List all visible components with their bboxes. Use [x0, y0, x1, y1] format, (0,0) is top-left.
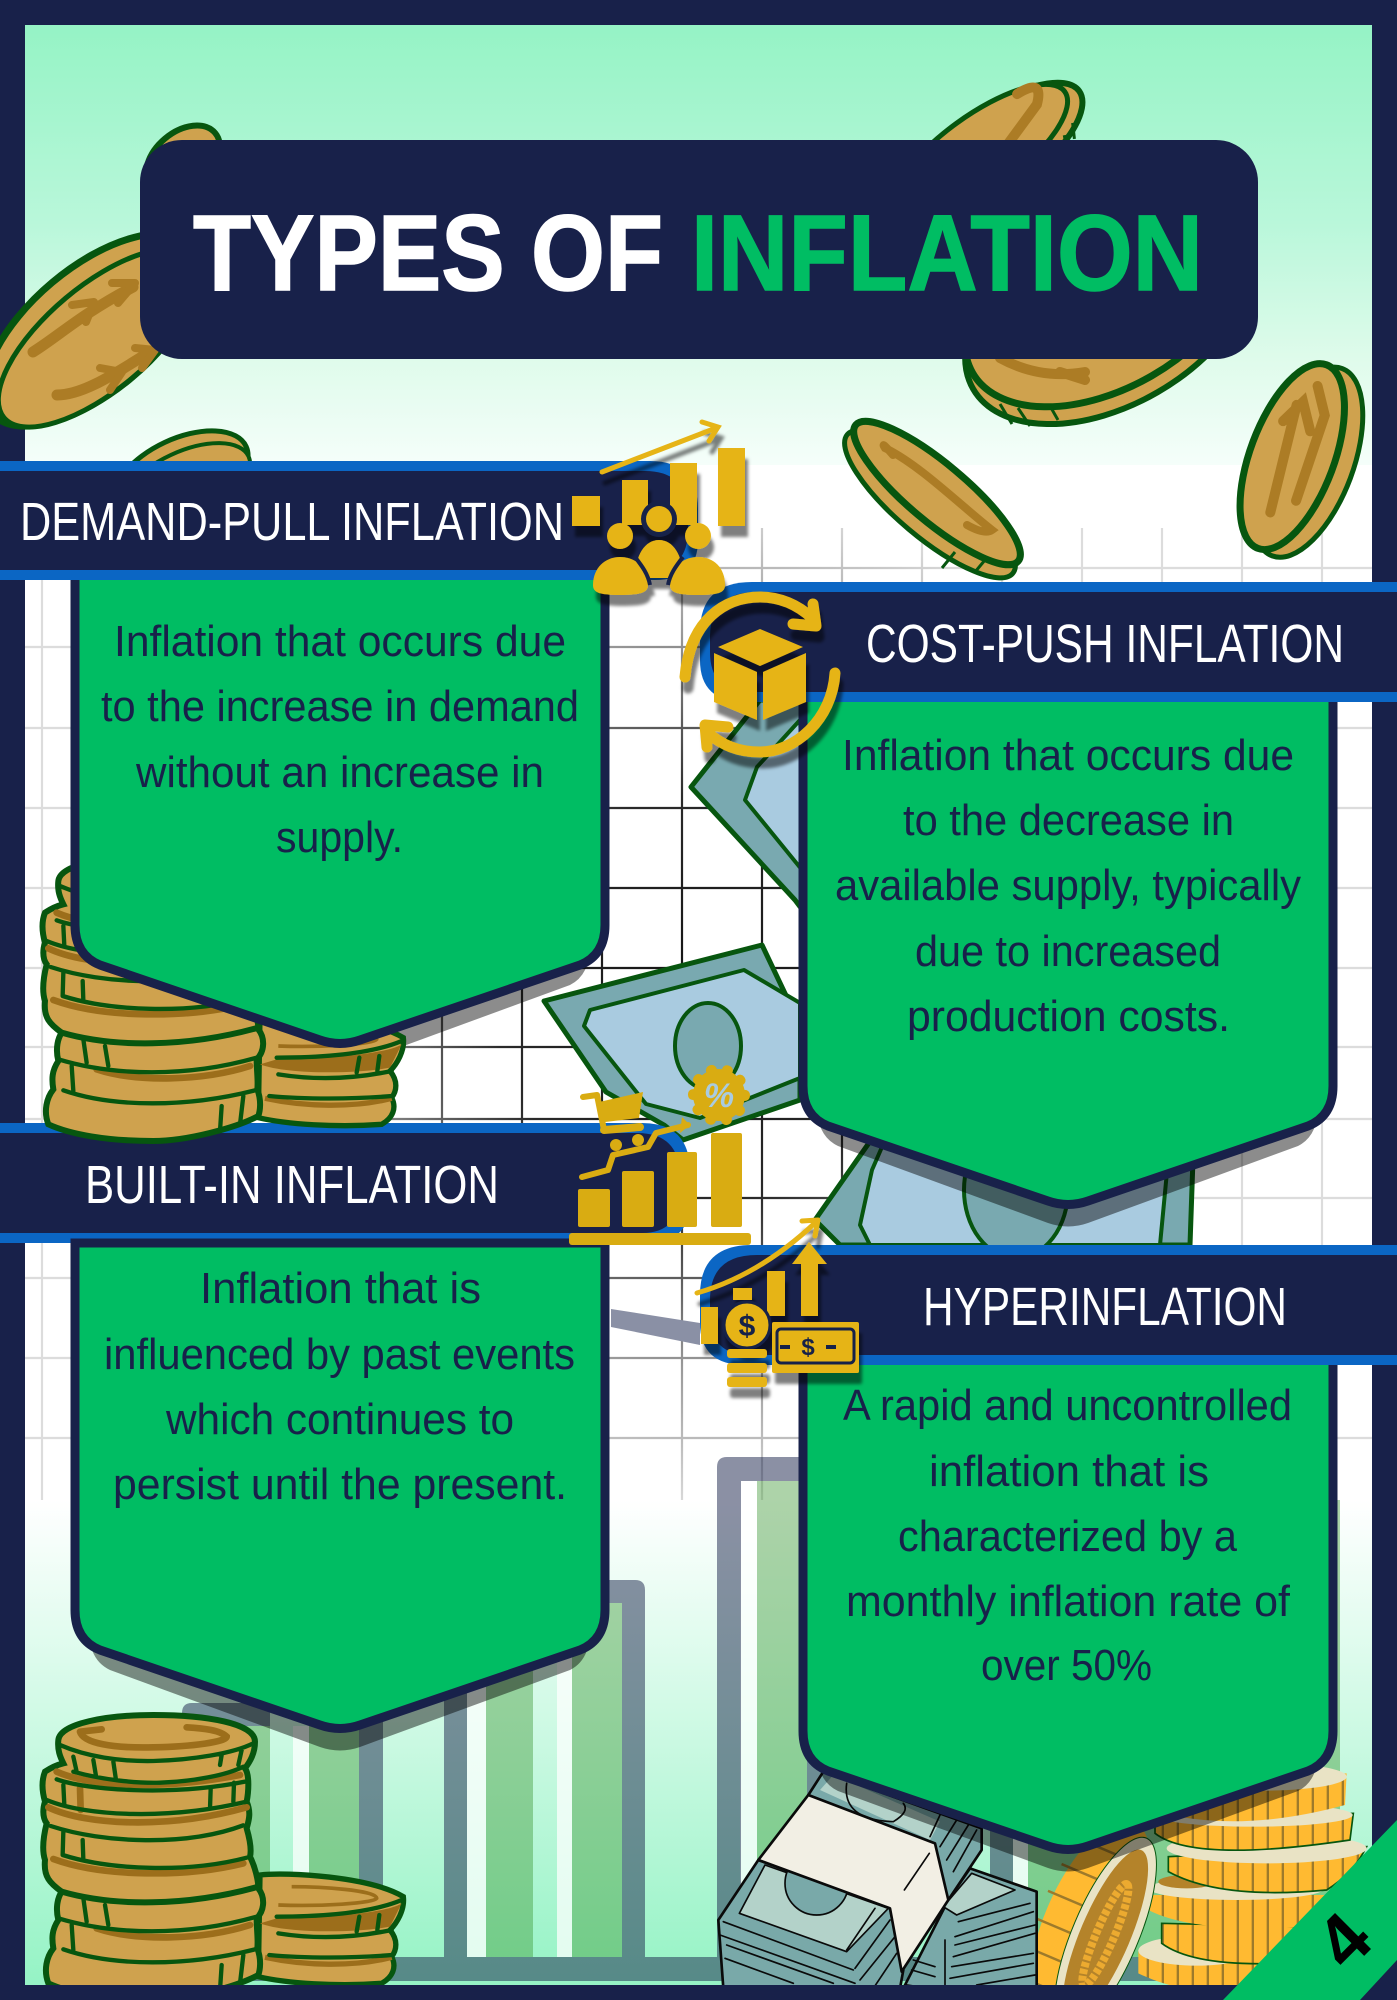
standing gold coin — [998, 1802, 1181, 2000]
gold coin stack lower right — [1138, 1763, 1367, 1992]
diagonal chart line — [611, 1309, 700, 1345]
title: INFLATION — [691, 192, 1203, 313]
title: TYPES OF — [193, 192, 663, 313]
text: built-in description: influenced by past events — [104, 1330, 575, 1379]
text: hyperinflation description: monthly inflation rate of — [846, 1577, 1291, 1626]
coin: tilted centre — [826, 403, 1037, 599]
text: built-in description — [104, 1264, 575, 1509]
text: cost-push description: production costs. — [907, 992, 1230, 1041]
icon: cost-push box and cycle arrows — [685, 597, 835, 752]
text: hyperinflation description — [843, 1381, 1292, 1690]
coin: left big — [0, 199, 231, 461]
coin: right behind title — [926, 139, 1294, 471]
banner: built-in inflation: BUILT-IN INFLATION — [85, 1155, 499, 1215]
text: hyperinflation description: inflation that is — [929, 1447, 1209, 1496]
coin: right tilted — [1218, 348, 1385, 572]
background grid — [25, 528, 1372, 1500]
banner: demand-pull inflation — [0, 461, 698, 580]
text: cost-push description — [835, 731, 1301, 1041]
money bundles — [718, 1772, 1037, 1988]
text: demand-pull description: supply. — [276, 813, 403, 862]
text: cost-push description: Inflation that occurs due — [842, 731, 1294, 780]
banner: cost-push inflation — [700, 582, 1397, 702]
text: cost-push description: available supply, typically — [835, 861, 1301, 910]
page number ribbon: 4 — [1300, 1897, 1387, 1984]
text: built-in description: which continues to — [165, 1395, 514, 1444]
text: demand-pull description: to the increase in demand — [101, 682, 579, 731]
text: hyperinflation description: over 50% — [981, 1641, 1152, 1690]
text: built-in description: persist until the present. — [113, 1460, 567, 1509]
text: cost-push description: to the decrease in — [903, 796, 1234, 845]
page number ribbon — [1223, 1820, 1397, 2000]
bill: middle — [544, 945, 800, 1140]
panel: demand-pull — [75, 575, 605, 1044]
text: built-in description: Inflation that is — [200, 1264, 481, 1313]
background bar chart — [182, 1457, 1372, 1981]
banner: hyperinflation — [700, 1245, 1397, 1365]
title — [140, 140, 1258, 359]
coin: top right — [871, 54, 1104, 257]
icon: hyperinflation money and arrow: $ — [739, 1310, 756, 1343]
coin: top left small — [133, 112, 233, 208]
text: hyperinflation description: A rapid and uncontrolled — [843, 1381, 1292, 1430]
icon: demand-pull chart and people — [572, 422, 745, 595]
bill: lower — [815, 1122, 1194, 1258]
panel: built-in — [75, 1243, 605, 1728]
text: demand-pull description — [101, 617, 579, 862]
coin: small above banner — [100, 412, 265, 547]
icon: hyperinflation money and arrow — [697, 1220, 859, 1387]
text: demand-pull description: without an increase in — [135, 748, 544, 797]
banner: hyperinflation: HYPERINFLATION — [923, 1277, 1287, 1337]
panel: hyperinflation — [803, 1360, 1333, 1850]
text: hyperinflation description: characterized by a — [898, 1512, 1237, 1561]
panel shadows — [89, 800, 1318, 1872]
text: cost-push description: due to increased — [915, 927, 1221, 976]
icon: built-in chart and cart: % — [704, 1077, 734, 1115]
panel: cost-push — [803, 695, 1333, 1204]
icon: hyperinflation money and arrow: $ — [801, 1334, 815, 1361]
icon: built-in chart and cart — [569, 1069, 751, 1245]
bill: upper — [691, 700, 810, 920]
banner: demand-pull inflation: DEMAND-PULL INFLATION — [20, 492, 564, 552]
banner: built-in inflation — [0, 1123, 690, 1243]
text: demand-pull description: Inflation that occurs due — [114, 617, 566, 666]
coin stack upper left — [42, 856, 404, 1141]
coin stack lower left — [42, 1715, 404, 2000]
